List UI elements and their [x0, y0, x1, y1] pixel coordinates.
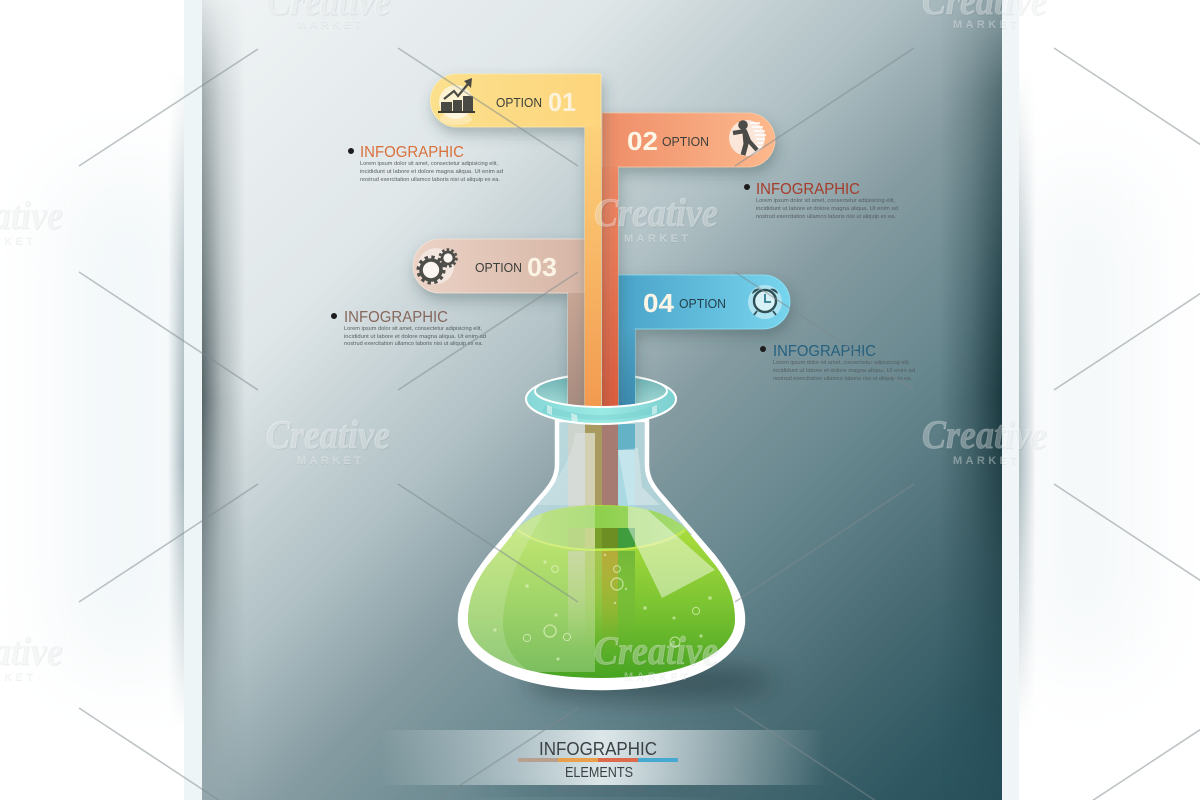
body 01: nostrud exercitation ullamco laboris nisi ut aliquip ex ea.	[360, 177, 500, 183]
text block 04	[760, 343, 915, 382]
option 03 label	[475, 252, 557, 282]
body 03: incididunt ut labore et dolore magna aliqua. Ut enim ad	[344, 334, 486, 340]
body 01	[360, 161, 503, 183]
watermark: edge upper	[0, 192, 62, 247]
option 03 tan tab	[413, 239, 586, 412]
body 02: nostrud exercitation ullamco laboris nisi ut aliquip ex ea.	[756, 214, 896, 220]
green liquid	[468, 505, 735, 678]
submerged strips	[568, 551, 635, 638]
flask rim front	[525, 391, 677, 425]
option 02 label: 02	[627, 126, 658, 156]
heading 02: INFOGRAPHIC	[756, 181, 860, 198]
watermark: edge lower	[0, 628, 62, 683]
body 04: Lorem ipsum dolor sit amet, consectetur adipisicing elit,	[773, 360, 910, 366]
watermark: centre upper: Creative	[594, 190, 718, 235]
option 01 label: OPTION	[496, 95, 542, 110]
watermark: right middle: Creative	[922, 412, 1046, 457]
icon: rising bar chart	[438, 78, 475, 125]
body 02: Lorem ipsum dolor sit amet, consectetur adipisicing elit,	[756, 198, 895, 204]
option 02 word: OPTION	[662, 134, 709, 149]
watermark: top left	[266, 0, 390, 31]
body 03: Lorem ipsum dolor sit amet, consectetur adipisicing elit,	[344, 326, 482, 332]
strips seen through glass	[568, 424, 635, 528]
option 03 number: 03	[527, 252, 557, 282]
option 02 label	[627, 126, 709, 156]
bubbles	[493, 554, 712, 661]
banner subheading: ELEMENTS	[565, 764, 633, 781]
body 01: incididunt ut labore et dolore magna aliqua. Ut enim ad	[360, 169, 503, 175]
banner colour bar	[518, 758, 678, 762]
watermark: centre upper: MARKET	[624, 233, 688, 245]
body 02	[756, 198, 898, 220]
body 02: incididunt ut labore et dolore magna aliqua. Ut enim ad	[756, 206, 898, 212]
text block 01	[348, 144, 503, 183]
left white margin	[78, 0, 202, 800]
banner heading: INFOGRAPHIC	[539, 739, 657, 759]
option 03 label: OPTION	[475, 260, 522, 275]
option 01 label	[496, 87, 576, 117]
option 04 blue tab	[618, 275, 790, 412]
text block 02	[744, 181, 898, 220]
option 04 word: OPTION	[679, 296, 726, 311]
option 01 number: 01	[548, 87, 576, 117]
flask body	[450, 420, 745, 690]
body 04: incididunt ut labore et dolore magna aliqua. Ut enim ad	[773, 368, 915, 374]
body 03	[344, 326, 486, 347]
body 03: nostrud exercitation ullamco laboris nisi ut aliquip ex ea.	[344, 341, 483, 347]
option 02 orange-red tab	[602, 113, 775, 412]
watermark: top right: MARKET	[953, 19, 1017, 31]
neck highlights	[535, 433, 660, 505]
watermark: left middle: Creative	[266, 412, 390, 457]
watermark: top left: MARKET	[297, 19, 361, 31]
option 04 label: 04	[643, 288, 675, 318]
icon: gears	[418, 248, 456, 284]
watermark: on flask: Creative	[594, 628, 718, 673]
heading 01: INFOGRAPHIC	[360, 144, 464, 161]
bottom title banner	[380, 730, 825, 791]
central gradient panel	[202, 0, 1002, 800]
right white margin	[1002, 0, 1109, 800]
heading 04: INFOGRAPHIC	[773, 343, 876, 360]
watermark: right middle: MARKET	[953, 455, 1017, 467]
text block 03	[331, 309, 486, 347]
watermark: on flask: MARKET	[624, 671, 688, 683]
watermark: top right	[922, 0, 1046, 31]
option 01 yellow tab	[430, 74, 601, 412]
body 04	[773, 360, 915, 382]
watermark: left middle: MARKET	[297, 455, 361, 467]
flask ground shadow	[525, 662, 775, 702]
option 04 label	[643, 288, 726, 318]
icon: alarm clock	[748, 285, 782, 319]
body 04: nostrud exercitation ullamco laboris nisi ut aliquip ex ea.	[773, 376, 912, 382]
body 01: Lorem ipsum dolor sit amet, consectetur adipisicing elit,	[360, 161, 498, 167]
icon: running person	[729, 120, 766, 156]
flask rim back	[526, 374, 676, 424]
glass highlights	[450, 505, 715, 672]
heading 03: INFOGRAPHIC	[344, 309, 448, 326]
